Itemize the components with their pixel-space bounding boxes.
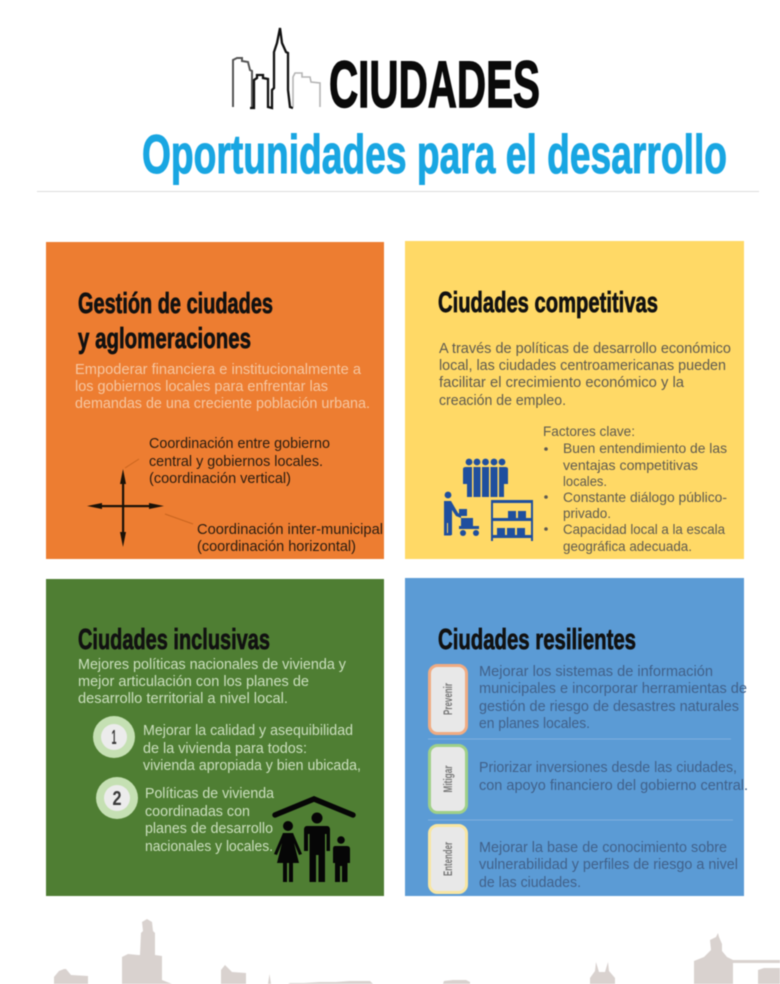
callout: coordinación vertical: Coordinación entre gobierno: [149, 436, 330, 452]
callout: coordinación horizontal: [197, 522, 383, 555]
text block: políticas de desarrollo: local, las ciudades centroamericanas pueden: [439, 358, 726, 374]
panel: ciudades inclusivas: [46, 579, 384, 896]
text block: políticas de vivienda: mejor articulación con los planes de: [78, 674, 309, 690]
list: factores clave: privado.: [563, 505, 611, 521]
list: factores clave: geográfica adecuada.: [563, 538, 692, 554]
heading: gestión de ciudades: [78, 288, 273, 355]
heading: ciudades resilientes: Ciudades resilientes: [438, 624, 636, 656]
text block: empoderar: demandas de una creciente población urbana.: [75, 396, 370, 412]
text block: políticas de vivienda: [78, 657, 347, 707]
tab: entender: [430, 826, 466, 892]
text block: entender: vulnerabilidad y perfiles de riesgo a nivel: [479, 857, 738, 873]
panel: ciudades competitivas: [405, 241, 744, 559]
tab: prevenir: Prevenir: [441, 683, 455, 715]
text block: entender: [479, 840, 738, 891]
icon: storage shelf: [491, 500, 533, 541]
text block: entender: Mejorar la base de conocimiento sobre: [479, 840, 727, 856]
list: factores clave: Buen entendimiento de las: [563, 440, 727, 456]
text block: empoderar: [75, 362, 370, 412]
heading: ciudades competitivas: Ciudades competitivas: [438, 287, 658, 319]
callout: coordinación horizontal: Coordinación inter-municipal: [197, 522, 383, 538]
heading: gestión de ciudades: y aglomeraciones: [78, 323, 251, 355]
text block: políticas de vivienda: desarrollo territorial a nivel local.: [78, 691, 288, 707]
text block: empoderar: Empoderar financiera e institucionalmente a: [75, 362, 362, 378]
tab: prevenir: [430, 666, 466, 734]
list: factores clave: locales.: [563, 473, 607, 489]
text block: prevenir: Mejorar los sistemas de información: [479, 664, 713, 680]
text block: item 1: Mejorar la calidad y asequibilidad: [143, 723, 353, 739]
text block: empoderar: los gobiernos locales para enfrentar las: [75, 379, 328, 395]
badge: number 2: [96, 777, 138, 819]
text block: item 1: de la vivienda para todos:: [143, 741, 307, 757]
tab: mitigar: Mitigar: [441, 765, 455, 792]
badge: number 1: [93, 716, 135, 758]
panel: gestión de ciudades: [46, 242, 384, 559]
text block: prevenir: municipales e incorporar herramientas de: [479, 681, 747, 697]
text block: prevenir: [479, 664, 747, 732]
heading: gestión de ciudades: Gestión de ciudades: [78, 288, 273, 320]
footer skyline silhouette: [54, 919, 780, 984]
text block: item 2: coordinadas con: [145, 804, 250, 820]
panel: ciudades resilientes: [405, 578, 748, 896]
callout: coordinación vertical: (coordinación vertical): [149, 471, 291, 487]
icon: group of workers: [463, 459, 508, 497]
badge: number 2: 2: [112, 788, 122, 810]
text block: item 1: [143, 723, 361, 774]
text block: mitigar: [479, 760, 748, 794]
tab: mitigar: [430, 746, 466, 812]
logo wordmark: CIUDADES: [329, 47, 540, 121]
callout: coordinación vertical: central y gobiernos locales.: [149, 454, 323, 470]
icon: family under roof: [274, 799, 353, 882]
list: factores clave: Constante diálogo público-: [563, 489, 727, 505]
text block: políticas de desarrollo: facilitar el crecimiento económico y la: [439, 375, 685, 391]
text block: item 1: vivienda apropiada y bien ubicada,: [143, 758, 361, 774]
text block: mitigar: Priorizar inversiones desde las ciudades,: [479, 760, 737, 776]
callout: coordinación vertical: [149, 436, 330, 487]
icon: coordination cross arrows: [87, 469, 164, 547]
list: factores clave: Factores clave:: [543, 423, 635, 439]
icon: warehouse worker with cart: [444, 492, 479, 536]
text block: item 2: nacionales y locales.: [145, 839, 273, 855]
tab: entender: Entender: [441, 842, 455, 876]
icon: city skyline logo: [233, 28, 320, 108]
text block: prevenir: gestión de riesgo de desastres naturales: [479, 699, 739, 715]
text block: mitigar: con apoyo financiero del gobierno central.: [479, 778, 748, 794]
list: factores clave: ventajas competitivas: [563, 457, 698, 473]
list: factores clave: [543, 423, 727, 554]
text block: prevenir: en planes locales.: [479, 716, 590, 732]
heading: ciudades inclusivas: Ciudades inclusivas: [78, 624, 270, 656]
text block: item 2: [145, 786, 275, 855]
list: factores clave: Capacidad local a la escala: [563, 521, 725, 537]
text block: item 2: Políticas de vivienda: [145, 786, 275, 802]
text block: políticas de desarrollo: [439, 341, 731, 409]
text block: políticas de desarrollo: creación de empleo.: [439, 393, 566, 409]
text block: item 2: planes de desarrollo: [145, 821, 273, 837]
badge: number 1: 1: [112, 727, 116, 749]
text block: entender: de las ciudades.: [479, 875, 581, 891]
text block: políticas de vivienda: Mejores políticas nacionales de vivienda y: [78, 657, 347, 673]
callout: coordinación horizontal: (coordinación horizontal): [197, 539, 356, 555]
text block: políticas de desarrollo: A través de políticas de desarrollo económico: [439, 341, 731, 357]
